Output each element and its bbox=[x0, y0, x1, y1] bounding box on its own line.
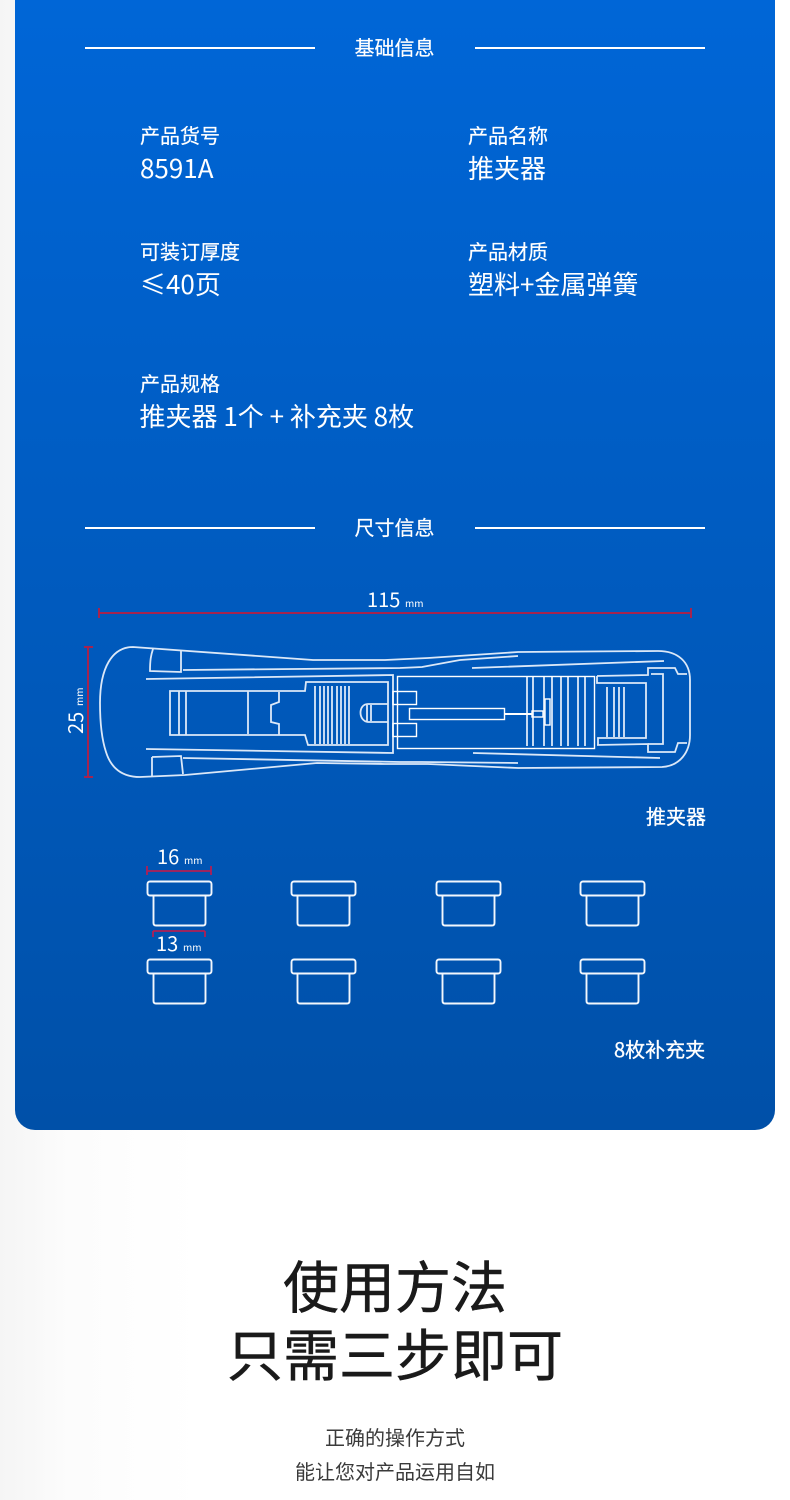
heading: basic information: 基础信息 bbox=[354, 32, 434, 61]
text block: binding thickness: 可装订厚度 bbox=[140, 236, 240, 265]
text block: usage description bbox=[295, 1422, 495, 1485]
text block: product material: 产品材质 bbox=[468, 236, 548, 265]
dimension: 25 mm height: mm bbox=[71, 687, 86, 706]
heading: size information: 尺寸信息 bbox=[354, 512, 434, 541]
text block: product specification: 推夹器 1个 + 补充夹 8枚 bbox=[140, 397, 414, 434]
dimension: 25 mm height bbox=[60, 647, 93, 777]
illustration: eight refill clips bbox=[148, 882, 644, 1004]
text block: usage description: 正确的操作方式 bbox=[325, 1422, 465, 1451]
text block: usage description: 能让您对产品运用自如 bbox=[295, 1456, 495, 1485]
label: eight refill clips: 8枚补充夹 bbox=[614, 1034, 705, 1063]
text block: product specification: 产品规格 bbox=[140, 368, 220, 397]
dimension: 13 mm clip body bbox=[153, 928, 205, 957]
text block: product material: 塑料+金属弹簧 bbox=[468, 265, 638, 302]
diagram: pusher clip outline with dimensions bbox=[60, 584, 692, 1004]
dimension: 16 mm clip head bbox=[147, 841, 211, 875]
text block: product number: 产品货号 bbox=[140, 120, 220, 149]
text block: product number bbox=[140, 120, 220, 186]
dimension: 25 mm height: 25 bbox=[60, 712, 89, 734]
text block: binding thickness: ≤40页 bbox=[140, 265, 221, 302]
dimension: 13 mm clip body: mm bbox=[183, 939, 202, 954]
title: how to use: 使用方法 bbox=[283, 1244, 507, 1325]
dimension: 16 mm clip head: mm bbox=[184, 852, 203, 867]
title: how to use: 只需三步即可 bbox=[227, 1312, 563, 1393]
text block: product name bbox=[468, 120, 548, 186]
title: how to use bbox=[227, 1244, 563, 1393]
text block: product material bbox=[468, 236, 638, 302]
text block: product number: 8591A bbox=[140, 149, 214, 186]
dimension: 13 mm clip body: 13 bbox=[156, 928, 178, 957]
text block: binding thickness bbox=[140, 236, 240, 302]
dimension: 16 mm clip head: 16 bbox=[157, 841, 179, 870]
dimension: 115 mm width: 115 bbox=[367, 584, 400, 613]
text block: product specification bbox=[140, 368, 414, 434]
panel: blue product information card bbox=[15, 0, 775, 1130]
illustration: pusher outline bbox=[100, 647, 690, 777]
illustration: pusher inner sliding parts bbox=[393, 676, 594, 748]
dimension: 115 mm width bbox=[99, 584, 691, 618]
text block: product name: 产品名称 bbox=[468, 120, 548, 149]
label: pusher: 推夹器 bbox=[646, 801, 706, 830]
dimension: 115 mm width: mm bbox=[405, 595, 424, 610]
text block: product name: 推夹器 bbox=[468, 149, 546, 186]
